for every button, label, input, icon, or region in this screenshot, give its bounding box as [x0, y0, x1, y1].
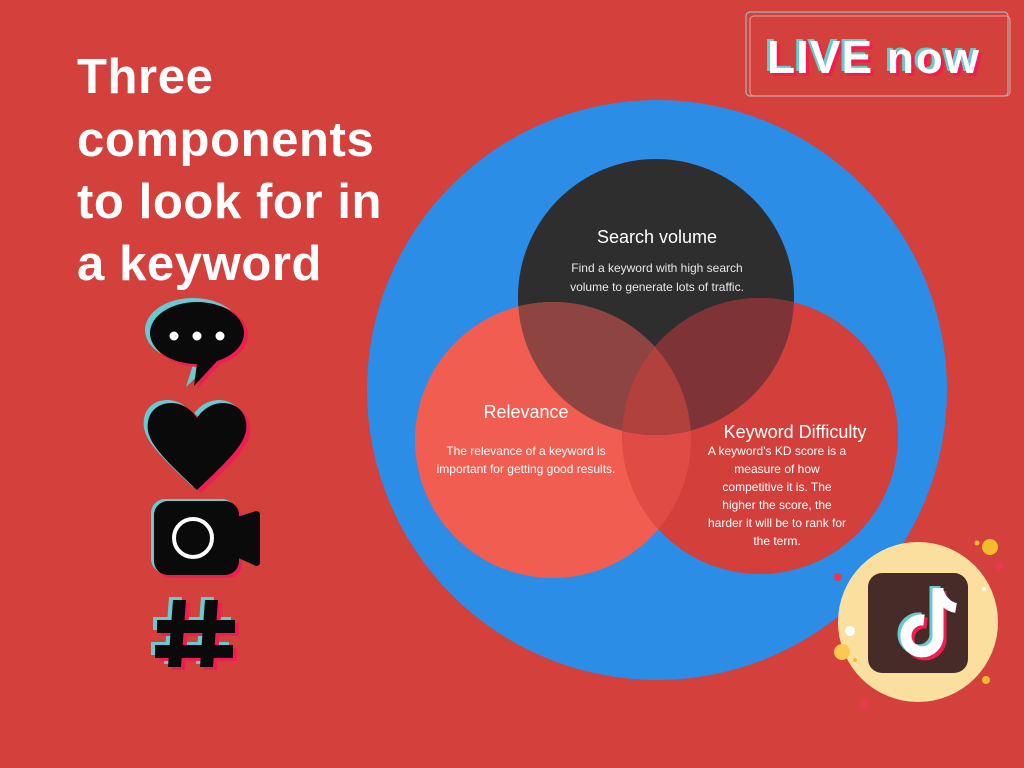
text: relevance: important for getting good results. — [437, 462, 615, 476]
text: search volume: Find a keyword with high search — [571, 261, 743, 275]
text: keyword difficulty: A keyword's KD score is a — [708, 444, 846, 458]
text: keyword difficulty: Keyword Difficulty — [724, 422, 866, 442]
icon: video camera — [151, 499, 260, 578]
text: keyword difficulty — [708, 422, 866, 548]
text: keyword difficulty: competitive it is. The — [722, 480, 832, 494]
icon: hashtag — [151, 597, 239, 670]
tiktok logo badge — [834, 539, 1003, 708]
blue circle background — [367, 100, 947, 680]
venn diagram — [415, 159, 898, 578]
text: keyword difficulty: harder it will be to rank for — [708, 516, 846, 530]
live now badge: LIVE now — [770, 34, 984, 86]
text: relevance — [437, 402, 615, 476]
text: keyword difficulty: measure of how — [734, 462, 820, 476]
title — [77, 50, 382, 291]
live now badge: LIVE now — [764, 29, 978, 81]
title: to look for in — [77, 175, 382, 229]
title: components — [77, 113, 374, 167]
live now badge: LIVE now — [767, 31, 981, 83]
text: keyword difficulty: higher the score, the — [722, 498, 832, 512]
text: search volume: volume to generate lots of traffic. — [570, 280, 744, 294]
live now badge — [746, 12, 1010, 96]
text: search volume: Search volume — [597, 227, 717, 247]
title: Three — [77, 50, 213, 104]
text: relevance: Relevance — [483, 402, 569, 422]
icon: heart — [144, 400, 250, 493]
icon: speech bubble — [145, 298, 248, 388]
title: a keyword — [77, 237, 322, 291]
text: search volume — [570, 227, 744, 294]
text: relevance: The relevance of a keyword is — [446, 444, 606, 458]
text: keyword difficulty: the term. — [753, 534, 801, 548]
